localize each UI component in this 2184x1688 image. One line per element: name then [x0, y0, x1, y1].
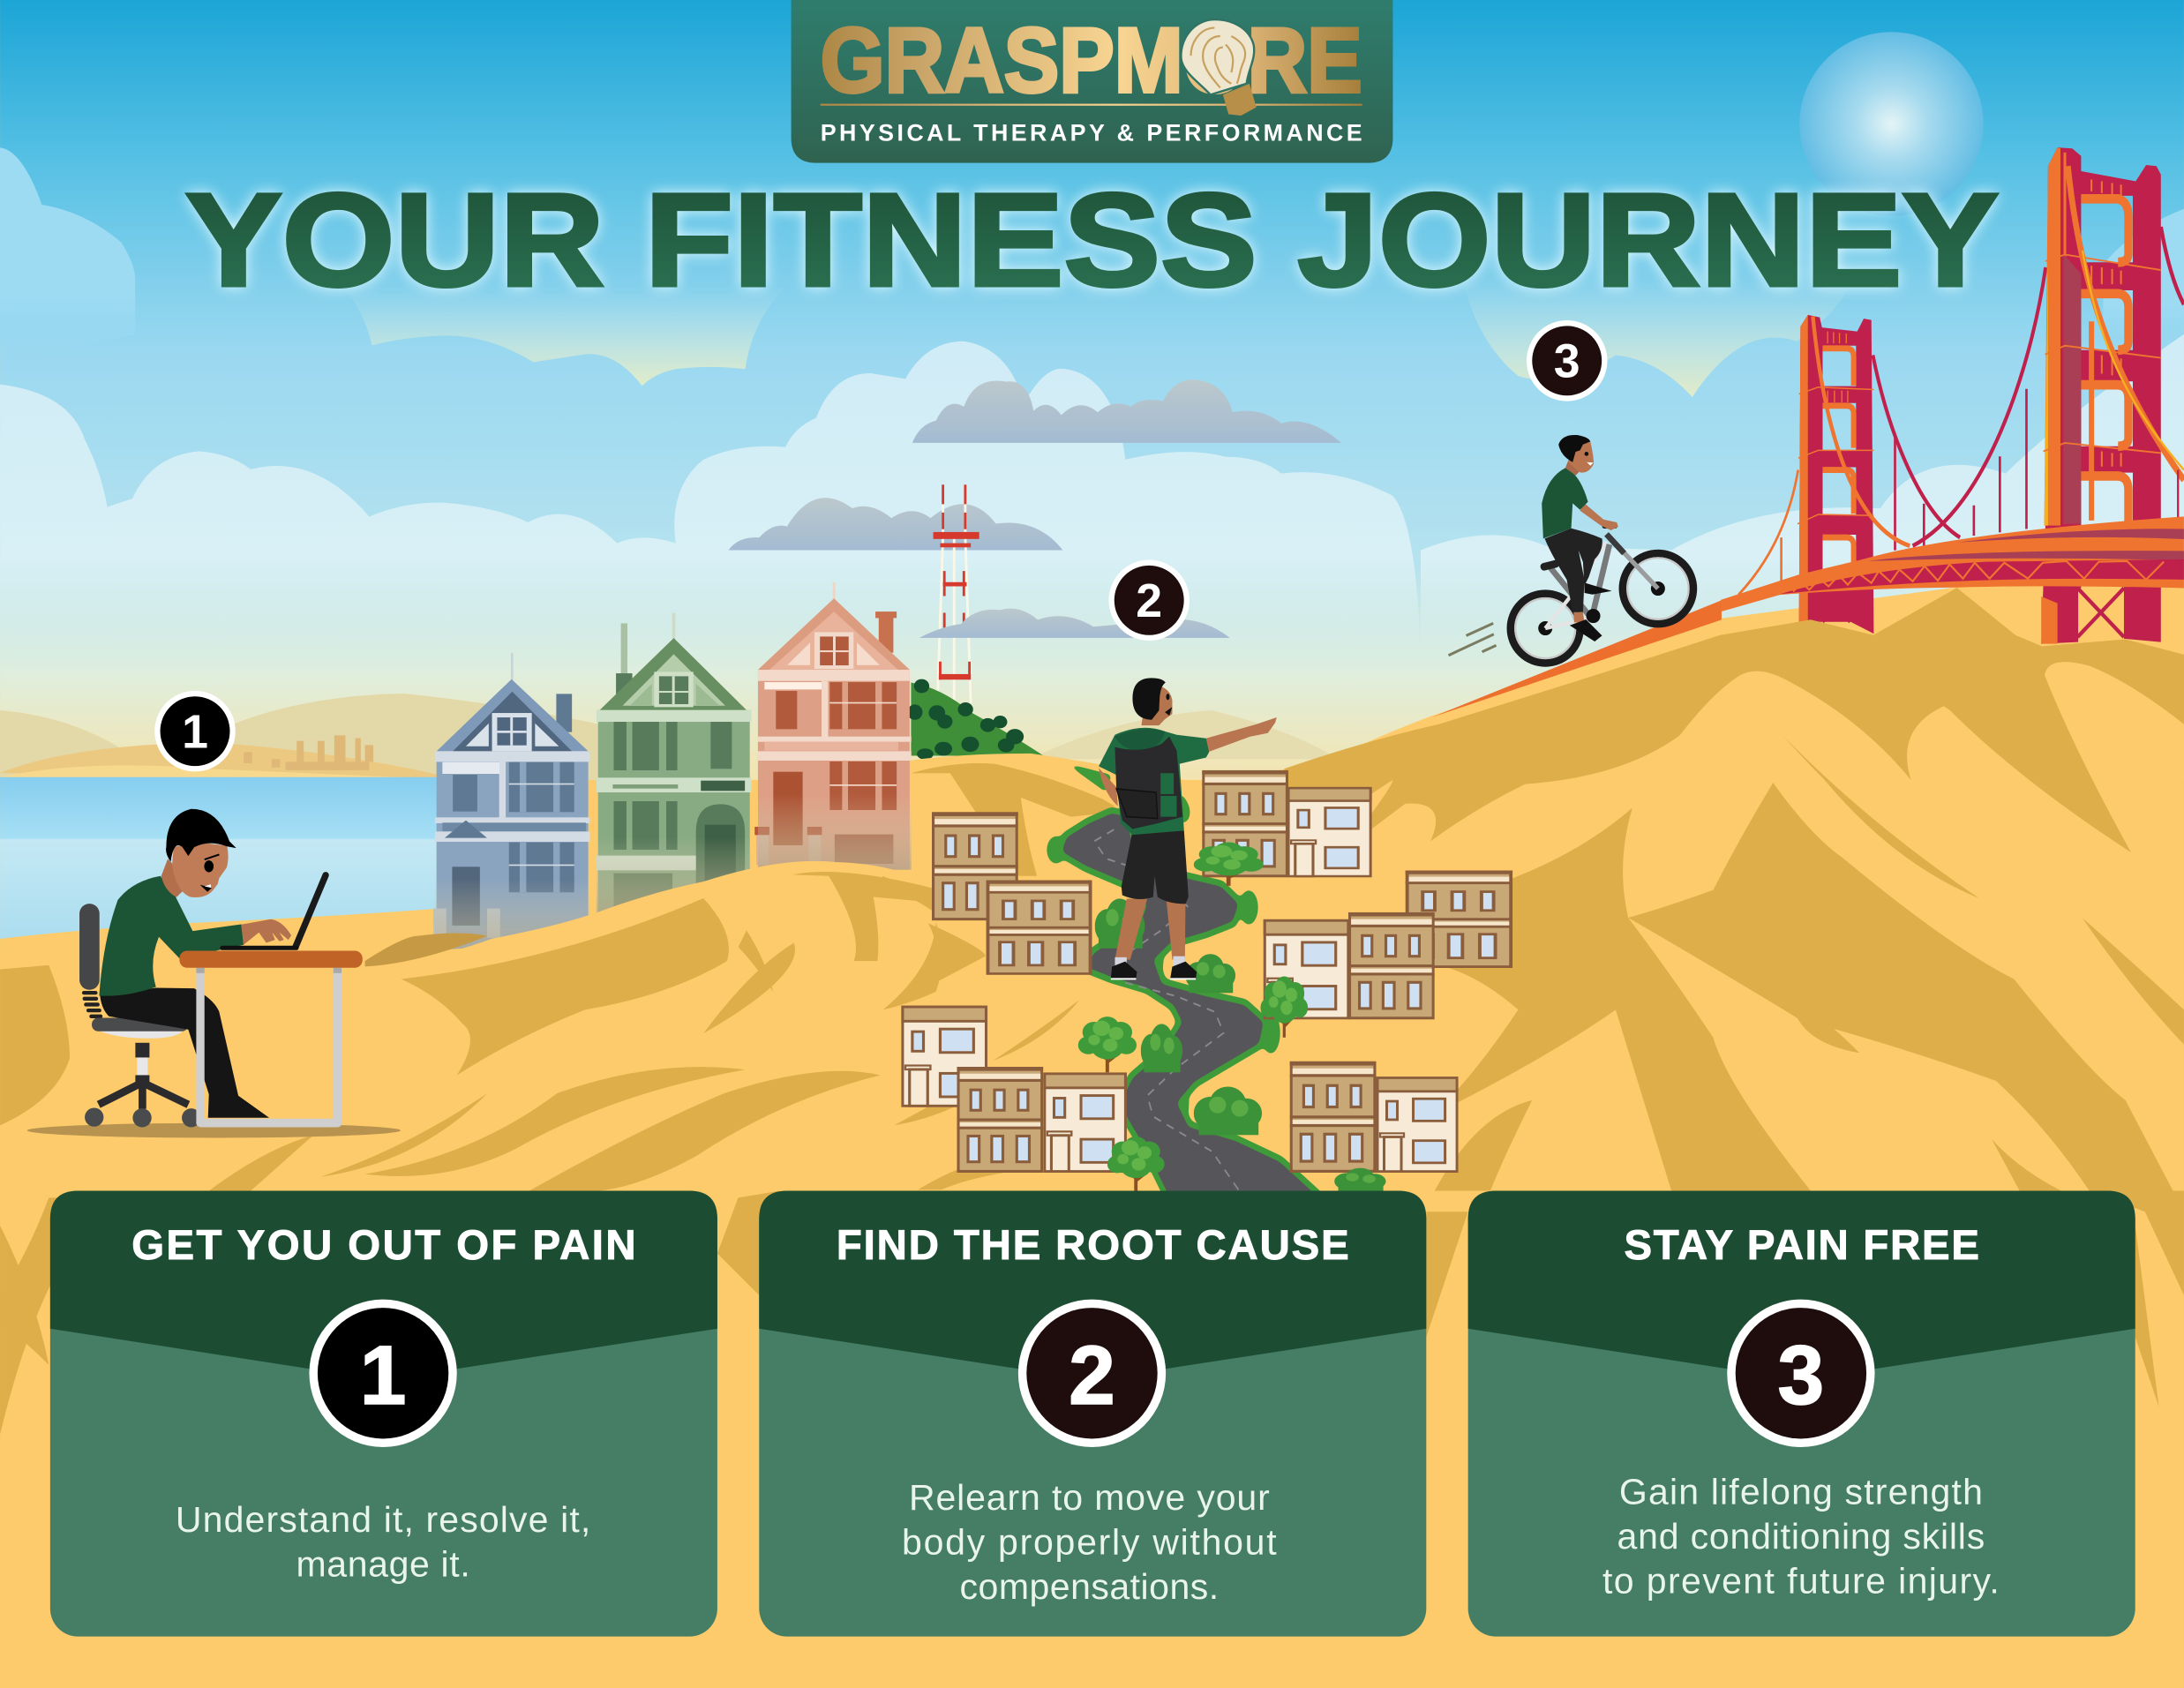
golden gate bridge — [1432, 147, 2184, 717]
step badge 3: 3 — [1554, 335, 1580, 388]
tagline: PHYSICAL THERAPY & PERFORMANCE — [821, 119, 1362, 146]
pointing arm — [1206, 717, 1277, 753]
beach sand — [0, 908, 446, 1059]
distant gray cloud middle — [729, 498, 1062, 550]
trees along road — [1078, 842, 1386, 1192]
number circle — [309, 1300, 457, 1447]
description: Understand it, resolve it, — [176, 1499, 590, 1540]
road centre dashes — [1094, 827, 1238, 1189]
panel: step 3 card — [1468, 1191, 2135, 1637]
green sweater — [99, 876, 244, 996]
house cluster middle right — [1265, 870, 1512, 1018]
far tower — [1797, 315, 1873, 634]
title: YOUR FITNESS JOURNEY — [185, 166, 1999, 314]
panel: step 1 card — [50, 1191, 717, 1637]
road verge — [1047, 762, 1317, 1197]
lower approach ramp — [1432, 600, 1722, 717]
wordmark: GRASPMORE — [821, 10, 1362, 112]
rear wheel — [1511, 594, 1580, 663]
bay water — [0, 777, 585, 951]
cyclist head — [1558, 435, 1594, 476]
heading: GET YOU OUT OF PAIN — [131, 1222, 636, 1269]
sand behind bridge — [1288, 557, 2184, 780]
description — [902, 1477, 1277, 1607]
legs and shoes — [1111, 898, 1197, 979]
step badge 3 — [1527, 320, 1608, 401]
number circle: 2 — [1069, 1329, 1115, 1422]
description — [176, 1499, 590, 1585]
house cluster upper right — [1202, 770, 1370, 876]
step badge 1 — [154, 691, 236, 771]
laptop — [220, 875, 326, 950]
number circle: 1 — [360, 1329, 406, 1422]
other arm — [1099, 768, 1118, 806]
sutro tower — [934, 484, 979, 703]
center hill behind houses — [891, 754, 1288, 975]
description: to prevent future injury. — [1602, 1561, 2000, 1602]
figure 2: person with backpack pointing — [1099, 678, 1277, 979]
description — [1602, 1472, 2000, 1602]
green treed hill — [907, 679, 1044, 760]
description: compensations. — [960, 1566, 1219, 1607]
ground shadow — [27, 1123, 401, 1137]
number circle — [1018, 1300, 1166, 1447]
shorts — [1122, 830, 1189, 904]
description: and conditioning skills — [1617, 1516, 1985, 1557]
front wheel — [1623, 553, 1693, 624]
speed lines — [1449, 623, 1497, 656]
number circle — [1727, 1300, 1875, 1447]
description: body properly without — [902, 1521, 1277, 1562]
number circle: 3 — [1778, 1329, 1824, 1422]
painted lady houses — [433, 582, 912, 957]
logo panel — [792, 0, 1392, 163]
main cables and suspenders — [1738, 227, 2184, 595]
heading: FIND THE ROOT CAUSE — [837, 1222, 1349, 1269]
sun — [1799, 32, 1984, 216]
bridge deck — [1721, 516, 2184, 611]
distant gray cloud lower — [919, 609, 1230, 638]
description: manage it. — [296, 1544, 470, 1585]
cyclist legs — [1545, 529, 1612, 641]
cyclist torso — [1542, 468, 1588, 538]
asphalt — [1062, 814, 1317, 1197]
office chair — [79, 904, 200, 1127]
winding road — [1047, 762, 1317, 1197]
trousers — [100, 987, 269, 1118]
backpack — [1115, 737, 1182, 829]
row houses — [903, 770, 1512, 1172]
description: Gain lifelong strength — [1619, 1472, 1983, 1512]
mid hill in front of houses — [0, 861, 1002, 1197]
step badge 2 — [1108, 560, 1190, 641]
house cluster upper left — [932, 812, 1092, 973]
shadows on center hill — [911, 763, 1115, 876]
house cluster lower left — [903, 1007, 1125, 1172]
cyclist arm — [1580, 503, 1618, 530]
figure 1: person at desk with laptop — [27, 809, 401, 1137]
house cluster lower right — [1290, 1062, 1457, 1172]
panel: step 2 card — [759, 1191, 1426, 1637]
bicycle frame — [1540, 524, 1658, 628]
green shirt — [1099, 728, 1209, 835]
head — [1132, 678, 1172, 725]
house: pink — [754, 582, 912, 870]
figure 3: cyclist on bridge approach — [1449, 435, 1693, 663]
near tower — [2041, 147, 2184, 644]
house: blue — [433, 653, 589, 957]
house: green — [597, 613, 752, 916]
icon: fingerprint light bulb — [1181, 19, 1257, 116]
sky background — [0, 0, 2184, 780]
heading: STAY PAIN FREE — [1624, 1222, 1979, 1269]
distant gray cloud top — [912, 379, 1341, 443]
distant hills and city — [0, 694, 1337, 780]
upper cloud bank — [0, 147, 2184, 397]
description: Relearn to move your — [909, 1477, 1270, 1518]
hand — [241, 919, 291, 945]
step badge 1: 1 — [182, 706, 208, 759]
logo rule — [821, 104, 1362, 106]
head — [161, 809, 236, 897]
foreground clouds — [0, 334, 2184, 696]
step badge 2: 2 — [1136, 574, 1162, 627]
tawny sand shadows — [0, 588, 2184, 1435]
main sand foreground — [0, 588, 2184, 1688]
desk — [179, 950, 363, 1127]
